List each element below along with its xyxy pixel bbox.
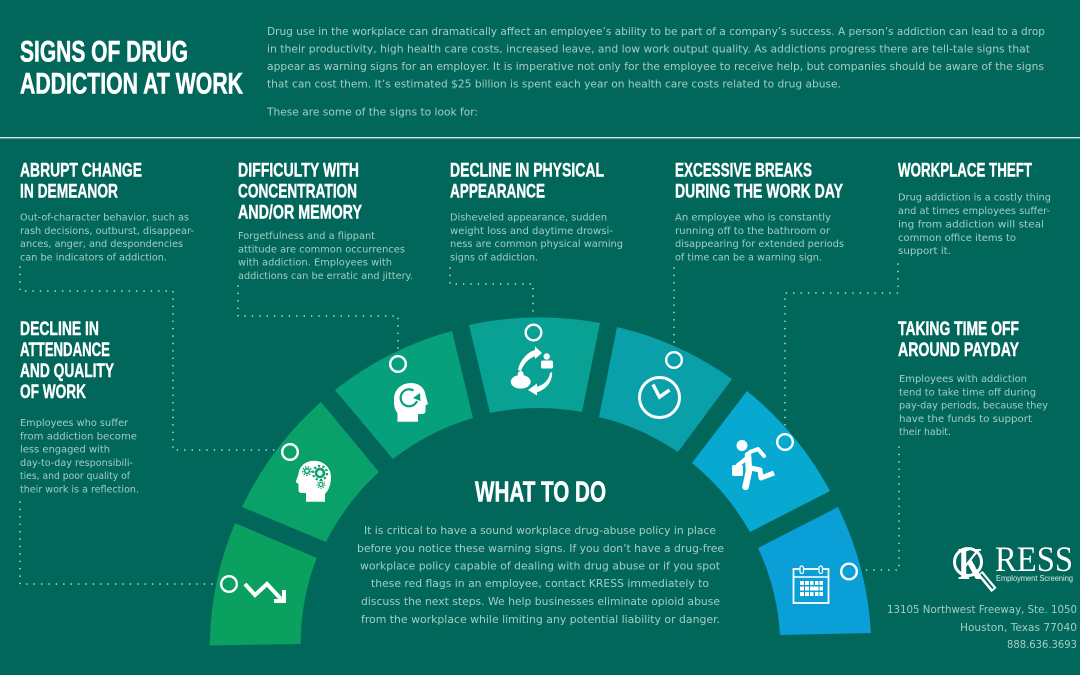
intro paragraph: appear as warning signs for an employer. It is imperative not only for the employee to receive help, but companies should be aware of the signs: [267, 60, 1044, 73]
text block: workplace theft: [898, 161, 1051, 257]
intro paragraph: Drug use in the workplace can dramatically affect an employee’s ability to be part of a company’s success. A person’s addiction can lead to a drop: [267, 25, 1045, 38]
text block: taking time off around payday: tend to take time off during: [899, 388, 1036, 398]
text block: decline in attendance: DECLINE IN: [20, 319, 99, 340]
icon: calendar: [794, 566, 828, 603]
text block: decline in physical appearance: [450, 161, 623, 264]
logo: KRESS Employment Screening: [954, 538, 1073, 590]
contact address: [887, 603, 1077, 651]
text block: decline in attendance: AND QUALITY: [20, 361, 114, 382]
text block: excessive breaks: DURING THE WORK DAY: [675, 182, 843, 203]
arc segment 4: appearance cycle: [469, 317, 600, 413]
arc segment 2: head with gears: [242, 402, 379, 542]
text block: difficulty with concentration: with addiction. Employees with: [238, 258, 392, 268]
text block: what to do body: these red flags in an employee, contact KRESS immediately to: [371, 577, 709, 590]
text block: excessive breaks: of time can be a warning sign.: [675, 252, 822, 264]
text block: abrupt change in demeanor: Out-of-character behavior, such as: [20, 212, 189, 224]
text block: abrupt change in demeanor: rash decisions, outburst, disappear-: [20, 226, 194, 237]
text block: decline in physical appearance: weight loss and daytime drowsi-: [450, 226, 613, 237]
text block: decline in attendance: from addiction become: [20, 432, 137, 442]
title: SIGNS OF DRUG: [20, 36, 188, 68]
text block: decline in attendance: their work is a reflection.: [20, 484, 139, 496]
text block: what to do body: from the workplace while limiting any potential liability or danger.: [361, 613, 720, 626]
icon: running figure with bag: [732, 440, 774, 487]
text block: decline in attendance: OF WORK: [20, 382, 86, 403]
text block: decline in attendance: [20, 319, 139, 496]
text block: what to do body: discuss the next steps. We help businesses eliminate opioid abuse: [361, 595, 720, 608]
text block: difficulty with concentration: DIFFICULTY WITH: [238, 161, 359, 182]
text block: decline in physical appearance: Disheveled appearance, sudden: [450, 212, 607, 224]
text block: abrupt change in demeanor: [20, 161, 194, 264]
text block: what to do body: workplace policy capable of dealing with drug abuse or if you spot: [360, 560, 721, 572]
text block: difficulty with concentration: AND/OR MEMORY: [238, 203, 362, 224]
intro paragraph: that can cost them. It’s estimated $25 billion is spent each year on health care costs related to drug abuse.: [267, 78, 841, 90]
text block: excessive breaks: [675, 161, 844, 264]
text block: decline in physical appearance: ness are common physical warning: [450, 239, 623, 250]
text block: abrupt change in demeanor: can be indicators of addiction.: [20, 252, 167, 264]
contact address: Houston, Texas 77040: [960, 621, 1077, 634]
text block: taking time off around payday: TAKING TIME OFF: [898, 319, 1019, 340]
arc segment 6: running figure: [692, 391, 830, 532]
arc segment 7: calendar: [758, 507, 871, 635]
arc segment 1: declining trend: [210, 523, 317, 646]
text block: abrupt change in demeanor: ances, anger, and despondencies: [20, 239, 183, 250]
text block: abrupt change in demeanor: IN DEMEANOR: [20, 182, 118, 203]
arc segment 5: clock: [599, 327, 732, 452]
arc segment 3: head with memory swirl: [335, 331, 473, 459]
intro paragraph: [266, 25, 1045, 119]
intro paragraph: These are some of the signs to look for:: [266, 106, 478, 119]
text block: difficulty with concentration: attitude are common occurrences: [238, 244, 405, 256]
text block: excessive breaks: disappearing for extended periods: [675, 239, 844, 250]
text block: what to do body: before you notice these warning signs. If you don’t have a drug-free: [357, 542, 724, 555]
text block: decline in attendance: Employees who suffer: [20, 418, 129, 429]
text block: what to do body: [357, 524, 724, 626]
logo: KRESS Employment Screening: K: [958, 538, 983, 589]
icon: head with gears: [296, 461, 331, 502]
title: ADDICTION AT WORK: [20, 67, 243, 100]
text block: decline in attendance: less engaged with: [20, 444, 110, 456]
text block: taking time off around payday: pay-day periods, because they: [899, 400, 1048, 412]
text block: decline in physical appearance: DECLINE IN PHYSICAL: [450, 161, 604, 182]
text block: excessive breaks: running off to the bathroom or: [675, 226, 831, 237]
text block: workplace theft: Drug addiction is a costly thing: [898, 192, 1051, 204]
text block: decline in physical appearance: signs of addiction.: [450, 252, 538, 264]
title: [20, 36, 243, 100]
text block: workplace theft: common office items to: [898, 233, 1016, 244]
text block: difficulty with concentration: Forgetfulness and a flippant: [238, 231, 375, 242]
text block: difficulty with concentration: CONCENTRATION: [238, 182, 357, 203]
text block: abrupt change in demeanor: ABRUPT CHANGE: [20, 161, 142, 182]
text block: taking time off around payday: have the funds to support: [899, 414, 1032, 425]
icon: downward trend arrow: [245, 584, 286, 603]
logo: KRESS Employment Screening: RESS: [995, 539, 1073, 579]
text block: taking time off around payday: [898, 319, 1048, 438]
icon: cycle with figures: [511, 346, 553, 396]
text block: decline in attendance: day-to-day responsibili-: [20, 458, 133, 469]
text block: decline in attendance: ATTENDANCE: [20, 340, 110, 361]
text block: difficulty with concentration: addictions can be erratic and jittery.: [238, 271, 413, 282]
logo: KRESS Employment Screening: Employment Screening: [996, 574, 1073, 583]
icon: clock: [640, 378, 680, 418]
icon: head with swirl: [394, 383, 428, 422]
text block: workplace theft: ing from addiction will steal: [898, 220, 1044, 230]
intro paragraph: in their productivity, high health care costs, increased leave, and low work output quality. As addictions progress there are tell-tale signs that: [267, 42, 1031, 56]
heading: what to do: WHAT TO DO: [475, 477, 606, 509]
text block: decline in physical appearance: APPEARANCE: [450, 182, 545, 203]
text block: decline in attendance: ties, and poor quality of: [20, 471, 130, 482]
text block: taking time off around payday: their habit.: [899, 427, 951, 438]
text block: workplace theft: and at times employees suffer-: [898, 206, 1050, 217]
text block: excessive breaks: EXCESSIVE BREAKS: [675, 161, 812, 182]
text block: taking time off around payday: Employees with addiction: [899, 374, 1027, 385]
text block: taking time off around payday: AROUND PAYDAY: [898, 340, 1019, 361]
text block: workplace theft: support it.: [898, 246, 951, 257]
text block: what to do body: It is critical to have a sound workplace drug-abuse policy in place: [364, 524, 716, 537]
text block: excessive breaks: An employee who is constantly: [675, 212, 831, 224]
text block: difficulty with concentration: [238, 161, 413, 282]
